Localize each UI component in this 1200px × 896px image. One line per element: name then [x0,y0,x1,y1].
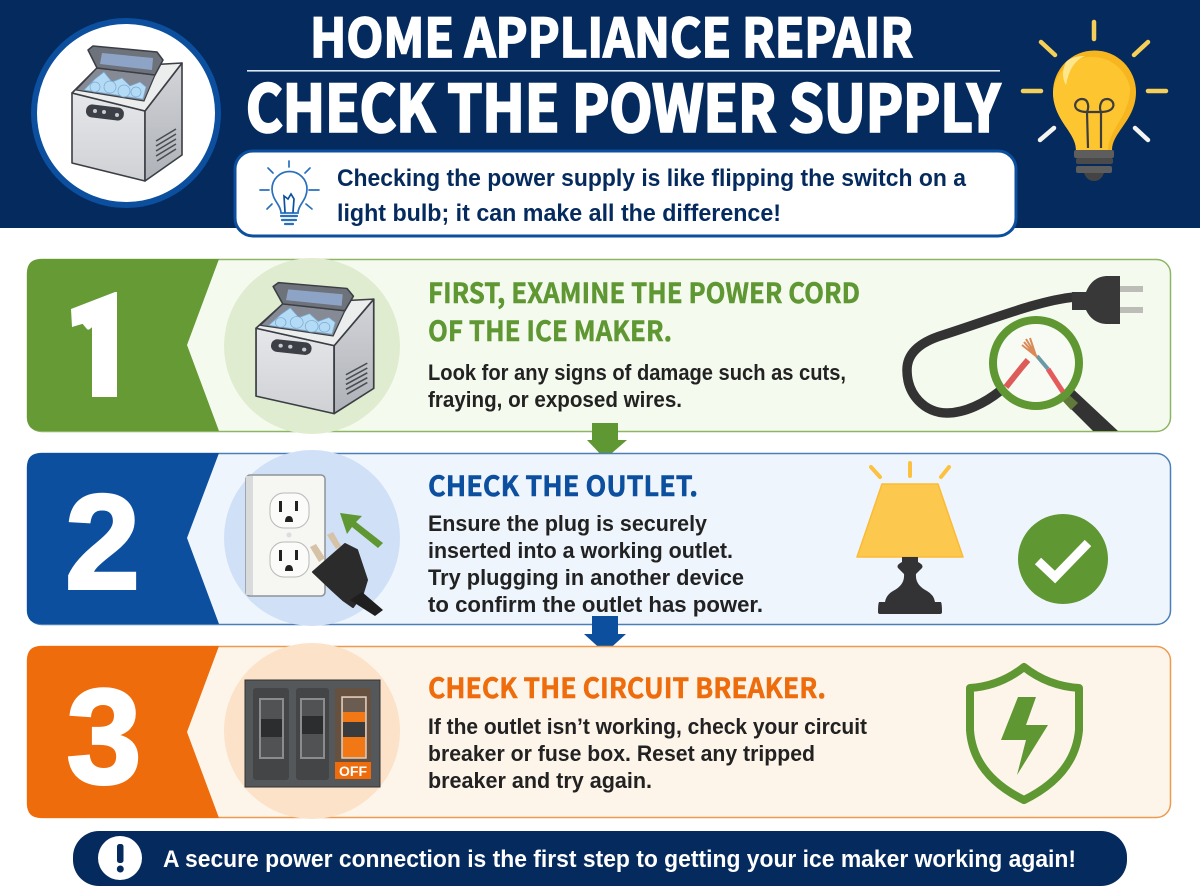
icon: green check mark [1018,514,1108,604]
step number 2: 2 [65,466,140,618]
icon: outline bulb [260,161,319,224]
panel: step 2 [27,450,1170,626]
arrow: step 1 to step 2 [587,423,627,459]
icon: ice maker [224,258,400,434]
step 2 body: Ensure the plug is securely [428,511,707,536]
callout: light switch analogy [235,151,1016,236]
callout text: light bulb; it can make all the difference! [337,200,781,227]
step 3 body: breaker and try again. [428,768,652,793]
step number 3: 3 [66,661,142,812]
step 3 body: breaker or fuse box. Reset any tripped [428,741,815,766]
icon: damaged power cord with magnifier [907,276,1143,431]
step 1 heading: FIRST, EXAMINE THE POWER CORD [428,272,860,312]
footer message: A secure power connection is the first step to getting your ice maker working again! [163,846,1076,873]
panel: step 1 [27,258,1170,434]
step number 1: 1 [65,291,141,415]
icon: ice maker badge [34,21,218,205]
OFF label: OFF [339,763,367,779]
step 3 heading: CHECK THE CIRCUIT BREAKER. [428,667,826,707]
step 2 body: inserted into a working outlet. [428,538,733,563]
icon: shield with lightning bolt [970,667,1079,800]
icon: wall outlet with plug [224,450,400,626]
title: check the power supply: CHECK THE POWER SUPPLY [246,58,1001,150]
icon: lit table lamp [857,463,963,614]
step 1 body: fraying, or exposed wires. [428,387,682,412]
icon: glowing light bulb [1023,22,1166,181]
arrow: step 2 to step 3 [584,616,626,653]
icon: circuit breaker panel [224,643,400,819]
step 2 heading: CHECK THE OUTLET. [428,465,698,505]
callout text: Checking the power supply is like flipping the switch on a [337,165,967,192]
step 3 body: If the outlet isn’t working, check your circuit [428,714,867,739]
step 2 body: to confirm the outlet has power. [428,592,763,617]
step 1 heading: OF THE ICE MAKER. [428,310,672,350]
panel: step 3 [27,643,1170,819]
step 2 body: Try plugging in another device [428,565,744,590]
footer banner [73,831,1127,886]
step 1 body: Look for any signs of damage such as cuts, [428,360,846,385]
header band [0,0,1200,228]
icon: exclamation mark [98,836,142,880]
